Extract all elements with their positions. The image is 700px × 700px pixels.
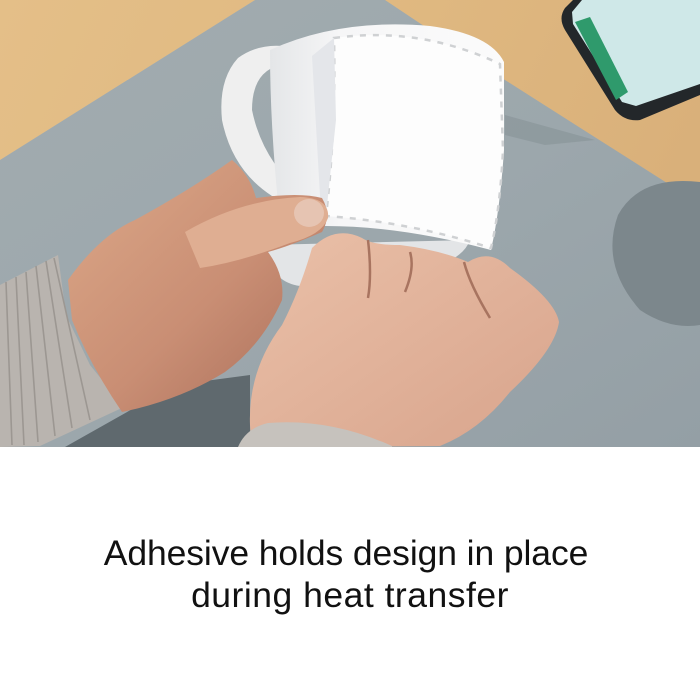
left thumb highlight [185,197,328,268]
sweater right sleeve [238,422,392,447]
wood table [0,0,700,447]
phone [562,0,700,120]
mug body [270,24,504,250]
mat shadows [65,115,700,447]
wrap side strip [312,38,336,214]
caption [104,533,588,615]
right hand [250,233,559,447]
left thumb nail [294,199,324,227]
mug handle [221,46,316,196]
caption: Adhesive holds design in place [104,533,588,573]
adhesive wrap panel [326,35,503,248]
left hand [68,160,327,412]
finger gaps [368,240,490,318]
photo: hands applying adhesive sublimation wrap to a white mug [0,0,700,447]
grey mat [0,0,700,447]
mug base [264,240,470,286]
sweater left sleeve [0,255,124,447]
caption: during heat transfer [191,575,509,615]
